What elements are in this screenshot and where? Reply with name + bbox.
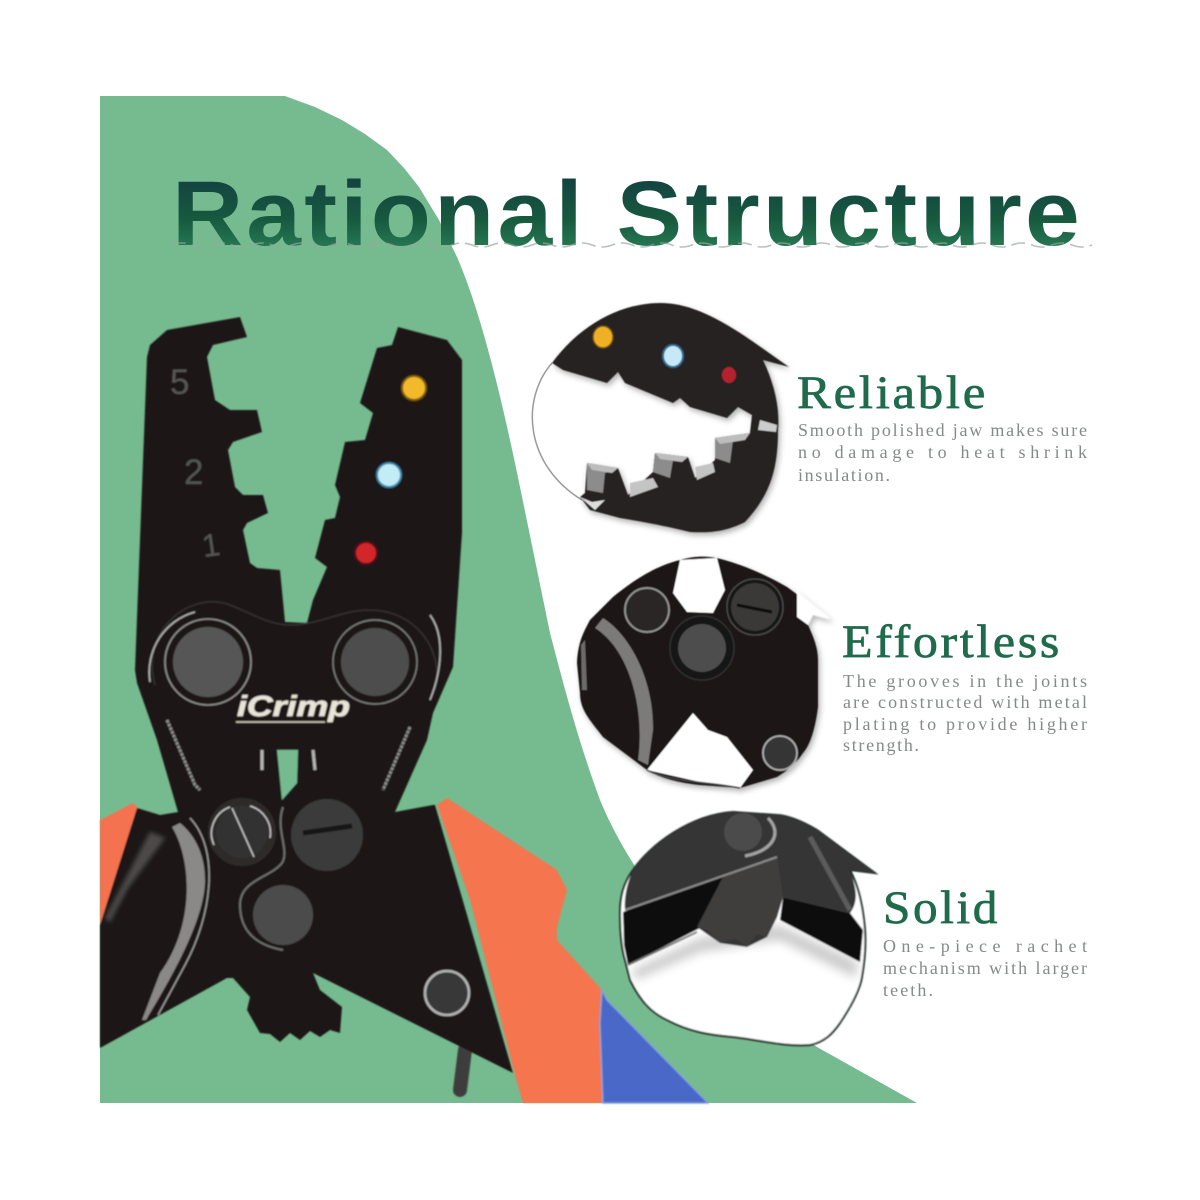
yellow terminal dot [402,376,426,400]
blue handle [600,990,708,1103]
description: Reliable: Smooth polished jaw makes sure [798,420,1087,440]
description: Reliable [798,420,1087,485]
ratchet teeth [697,857,783,947]
plate curve [240,807,284,950]
lock lever pin [460,1050,465,1090]
left black band [623,877,723,965]
side groove lines [167,720,410,790]
description: Effortless: strength. [843,735,919,755]
description: Solid: mechanism with larger [883,958,1087,978]
panel: effortless [577,557,1087,788]
size marking 1: 1 [200,526,222,564]
heading: Effortless: Effortless [842,616,1062,668]
inset right screw [727,579,783,635]
description: Effortless: are constructed with metal [843,692,1087,712]
description: Solid: One-piece rachet [883,936,1087,956]
inset red dot [722,367,736,383]
inset handle highlight [595,618,653,765]
lower small bolt [425,971,469,1015]
jaw slot [277,750,298,800]
inset shadow below jaws [632,925,858,980]
white bottom notch [647,713,753,788]
panel: solid [620,812,1087,1045]
inset blue dot [663,345,683,367]
description: Solid: teeth. [883,980,933,1000]
size marking 2: 2 [184,453,203,492]
iCrimp logo: iCrimp [237,691,350,723]
handle edge line [158,818,209,1015]
head plate outline [152,602,437,690]
left slotted screw [211,802,272,862]
inset small bolt [763,736,797,770]
inset handle sheen [581,640,587,690]
left rivet [165,619,251,705]
left handle sheen [105,832,165,922]
description: Effortless [843,671,1087,755]
right slotted screw [291,799,363,871]
description: Solid [883,936,1087,1000]
gray plate [625,812,875,947]
lower edge line [628,932,697,965]
light blue terminal dot [377,463,401,487]
inset left screw [625,588,669,632]
description: Reliable: insulation. [798,465,890,485]
plate edge line [625,857,777,910]
heading: Solid: Solid [883,882,1000,934]
white top notch [673,558,725,613]
left orange handle [100,803,138,925]
inset: ratchet closeup [620,812,875,1045]
rivet outer arcs [149,612,440,700]
bottom outline [647,770,740,788]
panel: reliable [532,303,1087,532]
inset yellow dot [593,326,613,348]
description: Effortless: The grooves in the joints [843,671,1087,691]
jaw bevel teeth [580,420,777,510]
left handle highlight [142,823,205,1020]
green background shape [100,96,917,1103]
plate sheen [810,837,850,910]
description: Reliable: no damage to heat shrink [798,442,1087,462]
centre rivet [253,885,313,945]
main illustration: crimping pliers [100,317,708,1103]
inset outline arc [532,363,582,500]
right orange handle [437,798,603,1103]
heading: Reliable: Reliable [797,367,988,419]
description: Effortless: plating to provide higher [843,714,1087,734]
inset bolt [724,813,775,856]
inset: jaw closeup [552,303,789,532]
right black band [780,897,863,962]
inset centre rivet [670,616,734,680]
title: Rational Structure [172,163,1083,265]
slot lines [262,750,315,770]
size marking 5: 5 [170,363,189,402]
pliers black body [100,317,513,1073]
red terminal dot [355,542,377,564]
inset: joints closeup [577,557,832,788]
white right notch [797,592,832,625]
right rivet [333,620,417,704]
